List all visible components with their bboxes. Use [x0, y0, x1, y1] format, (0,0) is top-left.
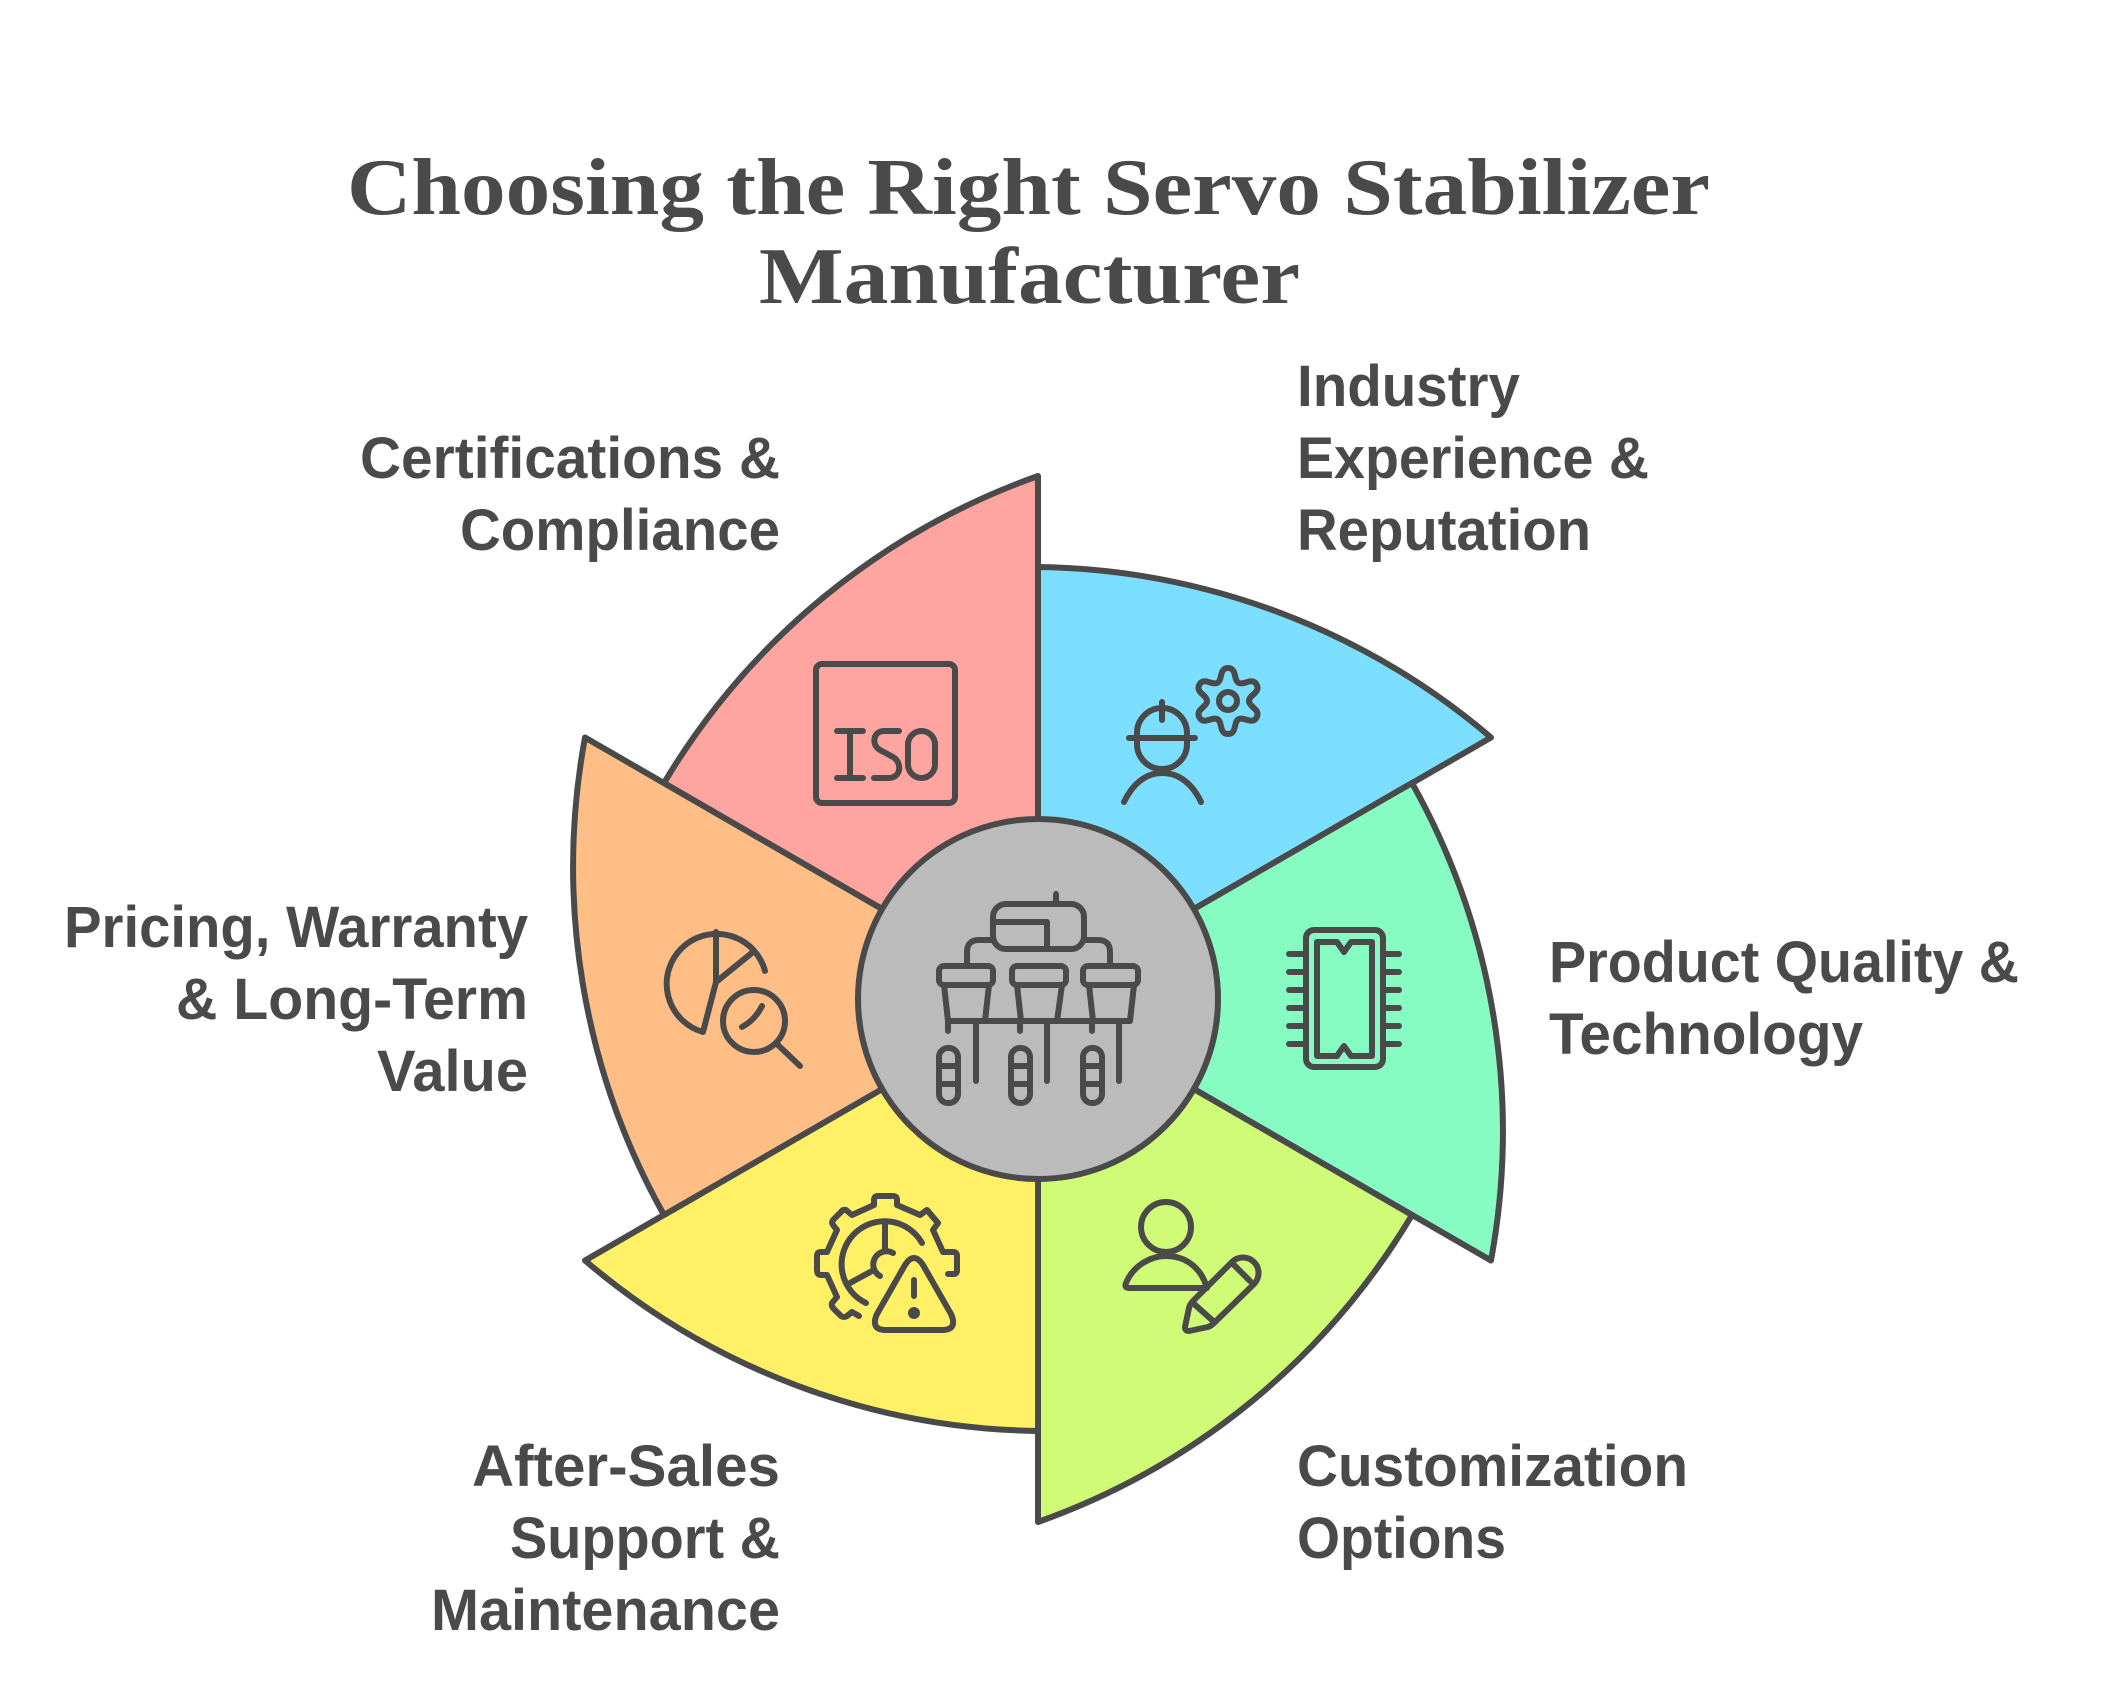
icon: microchip — [1289, 930, 1399, 1067]
label: product quality: Product Quality & — [1549, 930, 2019, 995]
label: certifications: Certifications & — [360, 426, 780, 491]
label: certifications — [360, 426, 780, 563]
label: pricing: Pricing, Warranty — [64, 895, 528, 960]
icon: servo stabilizer hierarchy — [939, 894, 1138, 1103]
label: after-sales: Support & — [510, 1506, 780, 1571]
panel: industry experience wedge — [1038, 567, 1491, 999]
label: certifications: Compliance — [460, 498, 780, 563]
label: industry experience: Experience & — [1297, 426, 1649, 491]
label: pricing: Value — [377, 1039, 528, 1104]
label: industry experience: Industry — [1297, 354, 1520, 419]
label: product quality — [1549, 930, 2019, 1067]
title — [347, 144, 1710, 321]
icon: gauge gear with warning — [817, 1196, 957, 1330]
icon: ISO certificate — [816, 664, 955, 803]
label: after-sales: After-Sales — [472, 1434, 780, 1499]
panel: customization wedge — [1038, 999, 1412, 1522]
label: after-sales: Maintenance — [431, 1578, 780, 1643]
panel: after-sales wedge — [585, 999, 1038, 1431]
panel: product quality wedge — [1038, 783, 1503, 1260]
label: customization: Options — [1297, 1506, 1506, 1571]
title: Choosing the Right Servo Stabilizer — [347, 144, 1710, 232]
label: customization: Customization — [1297, 1434, 1688, 1499]
label: pricing — [64, 895, 528, 1104]
label: after-sales — [431, 1434, 780, 1643]
label: industry experience: Reputation — [1297, 498, 1591, 563]
label: product quality: Technology — [1549, 1002, 1863, 1067]
panel: certifications wedge — [664, 476, 1038, 999]
label: customization — [1297, 1434, 1688, 1571]
center circle — [858, 819, 1218, 1179]
title: Manufacturer — [759, 233, 1300, 321]
label: industry experience — [1297, 354, 1649, 563]
panel: pricing wedge — [573, 738, 1038, 1215]
label: pricing: & Long-Term — [176, 967, 528, 1032]
icon: worker and gear — [1124, 668, 1262, 802]
icon: person with pencil — [1125, 1202, 1259, 1331]
icon: pie chart with magnifier — [667, 932, 800, 1066]
